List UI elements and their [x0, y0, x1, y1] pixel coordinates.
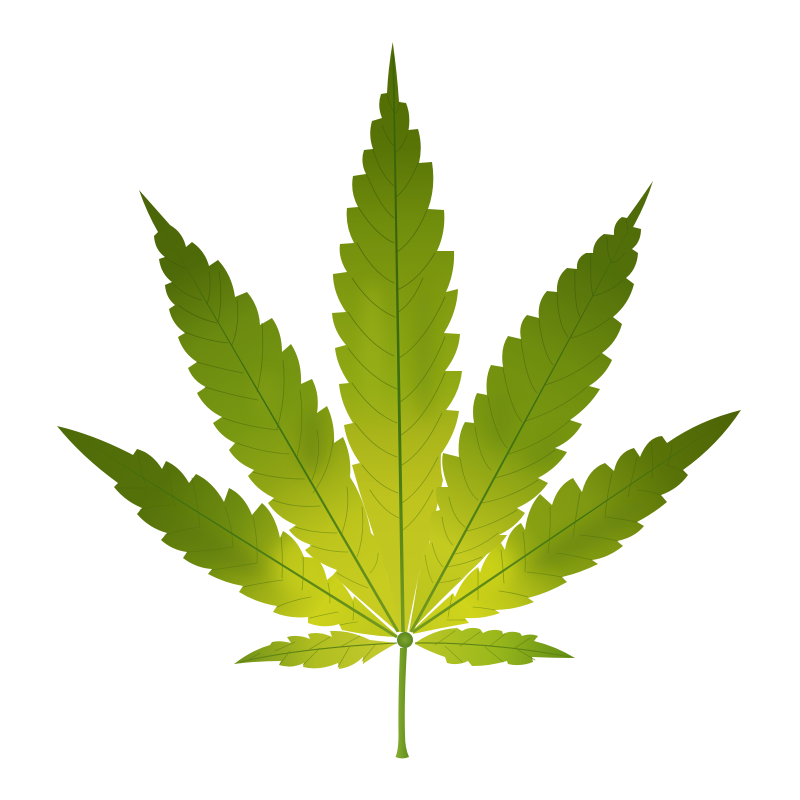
leaflet: bottom right [415, 628, 575, 666]
center midrib [392, 55, 405, 632]
bottom left midrib [240, 643, 397, 662]
upper left blade [139, 190, 400, 632]
upper right midrib [410, 190, 650, 633]
leaflet: lower right [412, 410, 741, 634]
center veins [348, 95, 445, 530]
stem [396, 648, 409, 758]
lower right blade [413, 410, 741, 634]
upper right blade [409, 181, 653, 632]
center blade [332, 42, 462, 632]
stem node [397, 632, 413, 648]
leaflet: upper left [139, 190, 400, 632]
lower left midrib [70, 432, 398, 638]
leaflet: center [332, 42, 462, 632]
bottom right veins [435, 631, 535, 662]
leaf illustration [57, 42, 741, 758]
bottom right midrib [415, 643, 570, 657]
upper left veins [165, 257, 378, 588]
leaflet: bottom left [234, 630, 397, 669]
leaflet: upper right [409, 181, 653, 633]
leaflet: lower left [57, 426, 398, 638]
lower left veins [118, 452, 357, 625]
bottom right blade [415, 628, 575, 666]
upper right veins [425, 220, 627, 583]
lower right midrib [412, 417, 730, 633]
lower left blade [57, 426, 397, 637]
lower right veins [447, 443, 685, 620]
bottom left blade [234, 630, 396, 669]
bottom left veins [250, 636, 375, 667]
upper left midrib [147, 200, 399, 632]
